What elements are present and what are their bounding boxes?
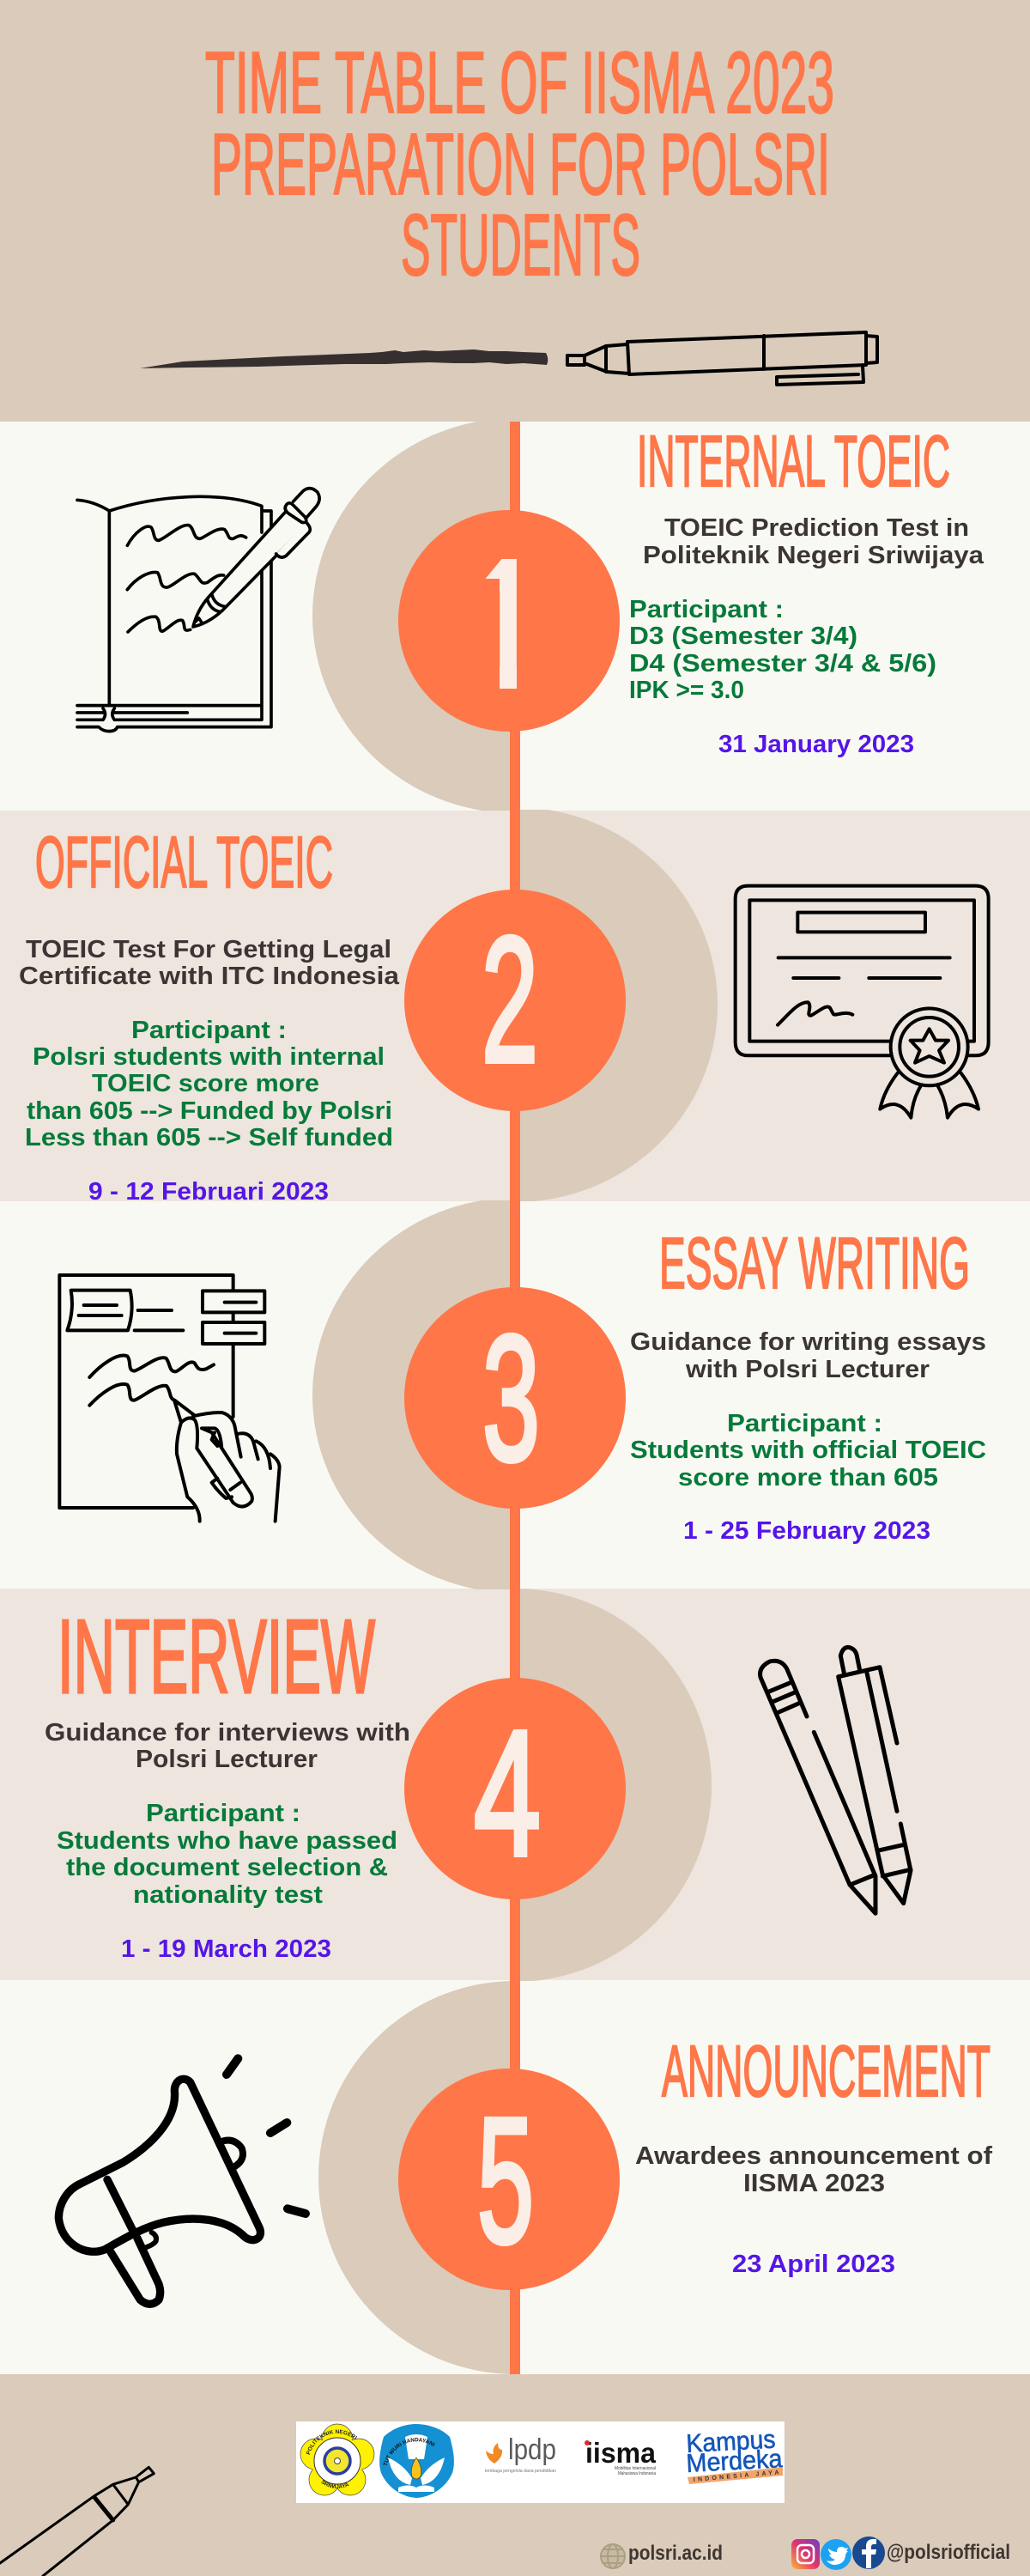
panel: step 1 background: [0, 422, 1030, 811]
logo: Kampus Merdeka: [686, 2426, 784, 2484]
step 5 text: 23 April 2023: [732, 2251, 895, 2278]
logo: Kampus Merdeka: Kampus: [686, 2426, 776, 2458]
step 5 text: Awardees announcement of: [635, 2142, 992, 2170]
logo strip: [296, 2421, 785, 2503]
panel: footer background: [0, 2374, 1030, 2576]
step 3 text: Guidance for writing essays: [630, 1328, 986, 1356]
step 4 text: 1 - 19 March 2023: [121, 1935, 331, 1963]
step 3 text: with Polsri Lecturer: [685, 1356, 930, 1383]
logo: Tut Wuri Handayani: TUT WURI HANDAYANI: [383, 2437, 435, 2465]
timeline line: [510, 422, 520, 2374]
step 3 text: score more than 605: [678, 1464, 938, 1492]
step 2 number badge: 2: [482, 901, 538, 1100]
step 1 text: TOEIC Prediction Test in: [664, 514, 969, 542]
step 4 text: Students who have passed: [57, 1827, 397, 1855]
step 2 number badge: [404, 890, 626, 1111]
website link: [601, 2542, 723, 2568]
logo: Kampus Merdeka: INDONESIA JAYA: [694, 2470, 779, 2483]
step 2 text: Certificate with ITC Indonesia: [19, 963, 400, 990]
step 1 number badge: 1: [478, 526, 535, 726]
step 2 text: TOEIC score more: [92, 1070, 319, 1097]
icon: brush stroke: [140, 349, 548, 368]
step 4 text: the document selection &: [66, 1854, 388, 1881]
icon: footer pen: [0, 2467, 154, 2576]
step 5 text: [635, 2142, 992, 2278]
step 1 text: 31 January 2023: [718, 731, 914, 758]
logo: IISMA: Mobilitas Internasional: [615, 2466, 656, 2471]
panel: step 5 background: [0, 1980, 1030, 2374]
step 4 text: nationality test: [133, 1881, 323, 1909]
icon: instagram: [791, 2539, 820, 2569]
half circle 3: [312, 1200, 510, 1589]
step 2 text: TOEIC Test For Getting Legal: [26, 936, 391, 963]
logo: Polsri: SRIWIJAYA: [321, 2480, 349, 2488]
logo: LPDP: lpdp: [508, 2433, 556, 2466]
step 3 text: Participant :: [727, 1410, 882, 1437]
step 3 number badge: 3: [482, 1299, 540, 1498]
step 5 text: IISMA 2023: [743, 2170, 885, 2197]
icon: megaphone: [58, 2058, 306, 2304]
step 4 text: Guidance for interviews with: [45, 1719, 410, 1747]
step 1 text: [629, 514, 985, 758]
step 1 text: Politeknik Negeri Sriwijaya: [643, 542, 985, 569]
icon: twitter: [821, 2539, 851, 2570]
step 2 text: Polsri students with internal: [33, 1043, 385, 1071]
step 4 text: [45, 1719, 410, 1963]
title: [205, 35, 834, 294]
step 4 text: Participant :: [146, 1800, 300, 1827]
step 2 text: Less than 605 --> Self funded: [25, 1124, 393, 1151]
icon: globe: [601, 2544, 625, 2568]
step 1 number badge: [398, 510, 620, 732]
panel: step 2 background: [0, 811, 1030, 1201]
icon: hand writing on document: [59, 1275, 280, 1522]
logo: LPDP: lembaga pengelola dana pendidikan: [485, 2469, 556, 2474]
step 1 text: D4 (Semester 3/4 & 5/6): [629, 650, 936, 677]
step 3 text: 1 - 25 February 2023: [683, 1517, 930, 1545]
icon: facebook: [852, 2537, 885, 2569]
half circle 2: [520, 810, 718, 1201]
panel: step 3 background: [0, 1201, 1030, 1589]
step 2 text: 9 - 12 Februari 2023: [88, 1178, 329, 1206]
half circle 4: [520, 1589, 712, 1981]
logo: IISMA: iisma: [585, 2437, 657, 2469]
logo: LPDP: [485, 2433, 556, 2474]
website link: polsri.ac.id: [628, 2542, 723, 2565]
title: STUDENTS: [401, 197, 640, 294]
step 3 text: [630, 1328, 986, 1545]
half circle 1: [312, 422, 510, 811]
logo: Tut Wuri Handayani: [379, 2424, 454, 2498]
half circle 5: [318, 1981, 510, 2374]
icon: notebook and pen: [77, 489, 319, 732]
panel: step 4 background: [0, 1589, 1030, 1980]
icon: certificate: [736, 886, 989, 1118]
step 1 text: D3 (Semester 3/4): [629, 623, 857, 650]
icon: marker pen: [567, 332, 877, 385]
logo: Polsri: POLITEKNIK NEGERI: [306, 2430, 357, 2455]
logo: IISMA: Mahasiswa Indonesia: [618, 2471, 656, 2476]
step 2 text: than 605 --> Funded by Polsri: [27, 1097, 392, 1125]
icon: pencil and pen: [760, 1647, 911, 1913]
step 5 number badge: [398, 2069, 620, 2290]
step 4 number badge: [404, 1678, 626, 1899]
step 3 text: Students with official TOEIC: [630, 1437, 986, 1464]
step 1 text: Participant :: [629, 596, 784, 623]
step 5 number badge: 5: [477, 2081, 534, 2281]
step 1 text: IPK >= 3.0: [629, 677, 744, 704]
panel: header background: [0, 0, 1030, 422]
step 2 heading: OFFICIAL TOEIC: [35, 822, 333, 902]
step 4 heading: INTERVIEW: [58, 1598, 375, 1715]
step 4 text: Polsri Lecturer: [136, 1746, 318, 1773]
social icons and handle: [791, 2537, 1010, 2570]
logo: Kampus Merdeka: Merdeka: [686, 2445, 784, 2478]
step 4 number badge: 4: [474, 1694, 541, 1893]
step 2 text: [19, 936, 400, 1206]
social icons and handle: @polsriofficial: [887, 2541, 1010, 2564]
step 2 text: Participant :: [131, 1017, 287, 1044]
logo: Polsri: [300, 2423, 374, 2495]
step 3 number badge: [404, 1287, 626, 1509]
